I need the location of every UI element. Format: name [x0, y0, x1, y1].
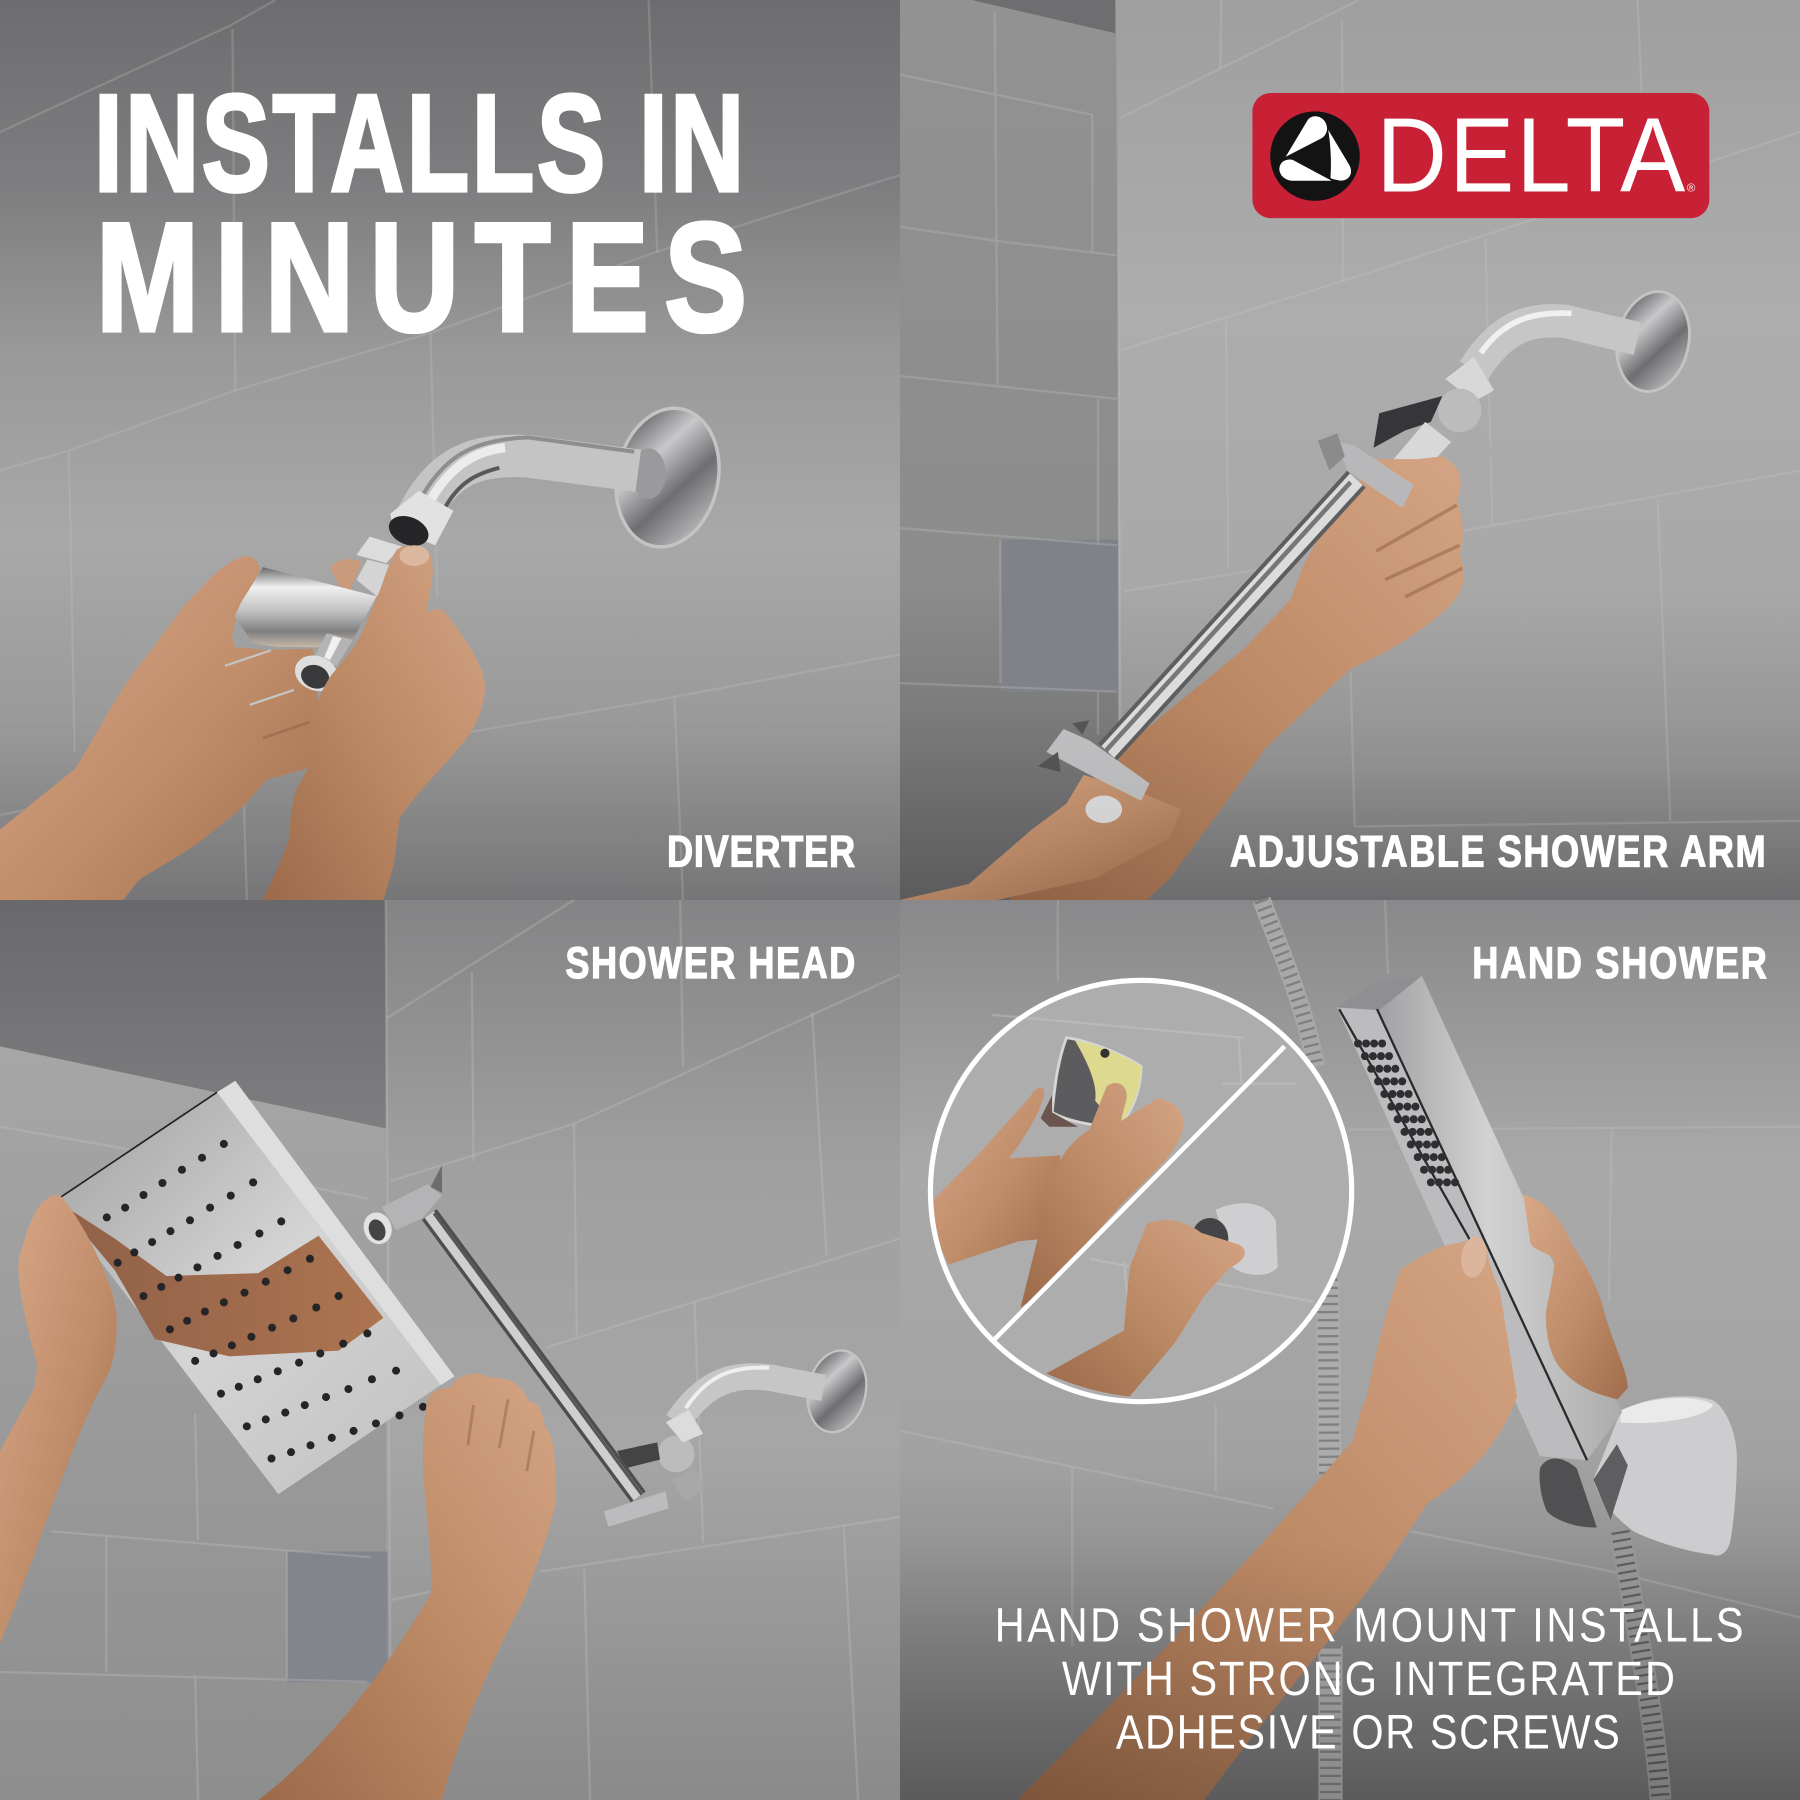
icon: rain shower head [55, 1081, 455, 1494]
spray nozzle field [1354, 1039, 1459, 1186]
icon: flexible hose middle [1328, 1279, 1330, 1800]
darker tile [287, 1551, 387, 1682]
wall background left [900, 0, 1118, 900]
title [94, 66, 747, 364]
hand and forearm [1018, 1240, 1517, 1800]
icon: flexible hose upper [1262, 900, 1316, 1066]
icon: diverter connector [1374, 357, 1494, 476]
wall background right [386, 900, 900, 1800]
inset ring [930, 980, 1352, 1402]
label: hand shower: HAND SHOWER [1472, 938, 1767, 988]
finger behind diverter [330, 559, 362, 591]
logo: delta badge [1252, 93, 1709, 218]
right hand [263, 546, 485, 900]
badge background [1252, 93, 1709, 218]
wand dark edges [1339, 1009, 1587, 1460]
left hand [0, 1195, 117, 1643]
icon: shower arm flange [1608, 285, 1698, 398]
fingers behind wand [1523, 1195, 1628, 1399]
label: shower head: SHOWER HEAD [565, 938, 855, 988]
left hand [0, 556, 324, 900]
spray nozzles [103, 1140, 427, 1462]
edge shadow [55, 1092, 217, 1201]
head top edge [217, 1081, 455, 1385]
lower hand and arm [1046, 1220, 1245, 1396]
bottom caption: HAND SHOWER MOUNT INSTALLS [995, 1598, 1744, 1652]
icon: threaded pipe end [384, 491, 453, 551]
bottom caption [995, 1598, 1744, 1759]
icon: hand shower wand [1337, 976, 1622, 1460]
logo wordmark: DELTA [1376, 96, 1685, 215]
arm reflection [57, 1201, 383, 1356]
upper left hand [934, 1087, 1061, 1264]
forearm and fist [1009, 456, 1464, 900]
icon: rod lower fitting [604, 1491, 669, 1527]
tile grout lines [900, 0, 1800, 900]
registered mark: ® [1687, 183, 1696, 195]
bottom shade [900, 1543, 1800, 1800]
ceiling shadow [972, 0, 1115, 33]
icon: shower arm flange [800, 1345, 874, 1438]
icon: shower arm pipe [677, 1368, 824, 1422]
wall background [900, 900, 1800, 1800]
panel: adjustable shower arm [900, 0, 1800, 900]
title: MINUTES [96, 190, 747, 364]
icon: adjustable rod [1104, 479, 1356, 753]
bottom caption: ADHESIVE OR SCREWS [1116, 1704, 1620, 1759]
icon: rod upper fitting [359, 1165, 442, 1248]
title: INSTALLS IN [94, 66, 744, 220]
icon: adjustable rod [429, 1213, 642, 1497]
lower forearm and hand [900, 775, 1181, 900]
icon: flexible hose lower [1620, 1531, 1661, 1800]
icon: rod lower fitting [1038, 720, 1150, 823]
label: adjustable shower arm: ADJUSTABLE SHOWER ARM [1230, 826, 1766, 877]
icon: delta emblem [1270, 111, 1360, 201]
panel: shower head [0, 900, 900, 1800]
tile grout lines [900, 900, 1800, 1646]
panel: hand shower [900, 900, 1800, 1800]
tile grout lines [0, 0, 900, 900]
inset background [932, 982, 1351, 1401]
wand back face [1377, 976, 1622, 1460]
bottom caption: WITH STRONG INTEGRATED [1062, 1651, 1675, 1706]
icon: shower arm flange [604, 399, 732, 557]
icon: diverter body [235, 537, 402, 697]
divider line [995, 1046, 1285, 1339]
wand top cap [1337, 976, 1422, 1010]
inset tile lines [992, 1015, 1313, 1319]
finger creases [468, 1399, 534, 1471]
thumbnail [399, 545, 429, 566]
icon: shower arm pipe [1474, 313, 1638, 370]
panel: diverter [0, 0, 900, 900]
wall background [0, 0, 900, 900]
thumbnail [1459, 1235, 1489, 1279]
label: diverter: DIVERTER [667, 826, 855, 877]
tile grout lines [0, 900, 900, 1800]
icon: diverter connector [617, 1410, 705, 1502]
upper right hand [1021, 1083, 1183, 1308]
hand finger gaps [225, 650, 310, 738]
icon: shower arm pipe [416, 437, 638, 519]
inset circle [930, 980, 1352, 1402]
wand spray face [1337, 1007, 1587, 1460]
wall mount [1192, 1203, 1278, 1275]
icon: wall mount holder [1540, 1396, 1737, 1556]
wall background right [1118, 0, 1800, 900]
head face [55, 1092, 441, 1494]
ceiling recess [0, 900, 386, 1128]
right hand and arm [258, 1374, 556, 1800]
wall background left [0, 1043, 386, 1800]
adhesive mount plate [1041, 1038, 1141, 1127]
finger creases [1376, 505, 1462, 597]
darker tile [1000, 540, 1118, 692]
bottom shade [900, 717, 1800, 900]
icon: rod top fitting [1318, 433, 1414, 508]
